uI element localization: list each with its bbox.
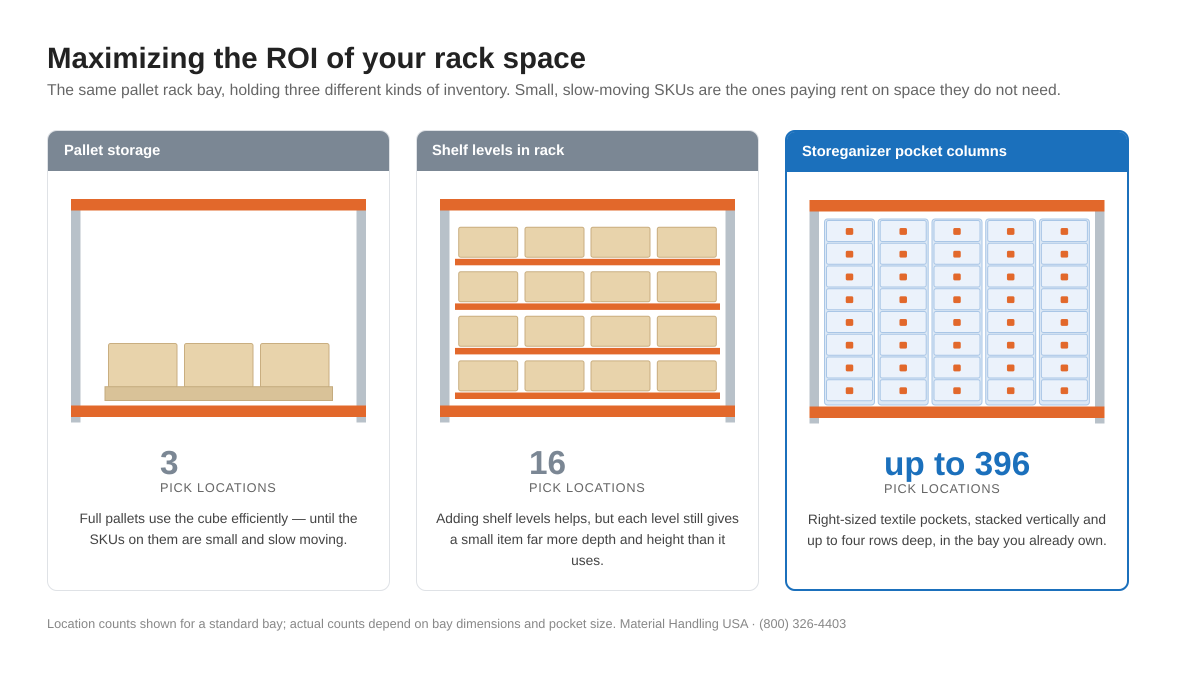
panel heading: shelf levels — [416, 130, 759, 171]
pocket column 4 — [986, 219, 1036, 405]
stat label: PICK LOCATIONS — [529, 480, 646, 495]
panel heading: pallet storage: Pallet storage — [64, 143, 160, 159]
shelf beams — [455, 259, 720, 399]
footnote: Location counts shown for a standard bay; actual counts depend on bay dimensions and pocket size. Material Handling USA · (800) 326-4403 — [47, 616, 846, 631]
panel: storeganizer pocket columns — [785, 130, 1129, 591]
description — [79, 511, 358, 547]
stat label: PICK LOCATIONS — [884, 481, 1001, 496]
title: Maximizing the ROI of your rack space — [47, 42, 586, 75]
description: SKUs on them are small and slow moving. — [90, 532, 347, 547]
panel heading: pallet storage — [47, 130, 390, 171]
rack: shelf levels — [440, 199, 735, 422]
panel: pallet storage — [47, 130, 390, 591]
pocket column 1 — [824, 219, 874, 405]
stat: 16: 16 — [529, 445, 566, 482]
rack: storeganizer pockets — [810, 200, 1104, 424]
shelf cartons — [459, 227, 716, 391]
stat: 3: 3 — [160, 445, 179, 482]
description — [436, 511, 739, 568]
rack: pallet storage — [71, 199, 366, 422]
subtitle: The same pallet rack bay, holding three different kinds of inventory. Small, slow-moving SKUs are the ones paying rent on space they do not need. — [47, 82, 1061, 99]
pallet load — [105, 344, 332, 400]
description: Adding shelf levels helps, but each level still gives — [436, 511, 739, 526]
description — [807, 512, 1107, 548]
pocket column 5 — [1039, 219, 1089, 405]
pocket column 2 — [878, 219, 928, 405]
description: Full pallets use the cube efficiently — until the — [79, 511, 358, 526]
stat: up to 396: up to 396 — [884, 446, 1030, 483]
pocket column 3 — [932, 219, 982, 405]
stat label: PICK LOCATIONS — [160, 480, 277, 495]
description: a small item far more depth and height than it — [450, 532, 725, 547]
panel: shelf levels in rack — [416, 130, 759, 591]
description: uses. — [571, 553, 604, 568]
panel heading: storeganizer — [785, 130, 1129, 172]
panel heading: storeganizer: Storeganizer pocket columns — [802, 144, 1007, 160]
panel heading: shelf levels: Shelf levels in rack — [432, 143, 564, 159]
description: Right-sized textile pockets, stacked vertically and — [808, 512, 1106, 527]
description: up to four rows deep, in the bay you already own. — [807, 533, 1107, 548]
